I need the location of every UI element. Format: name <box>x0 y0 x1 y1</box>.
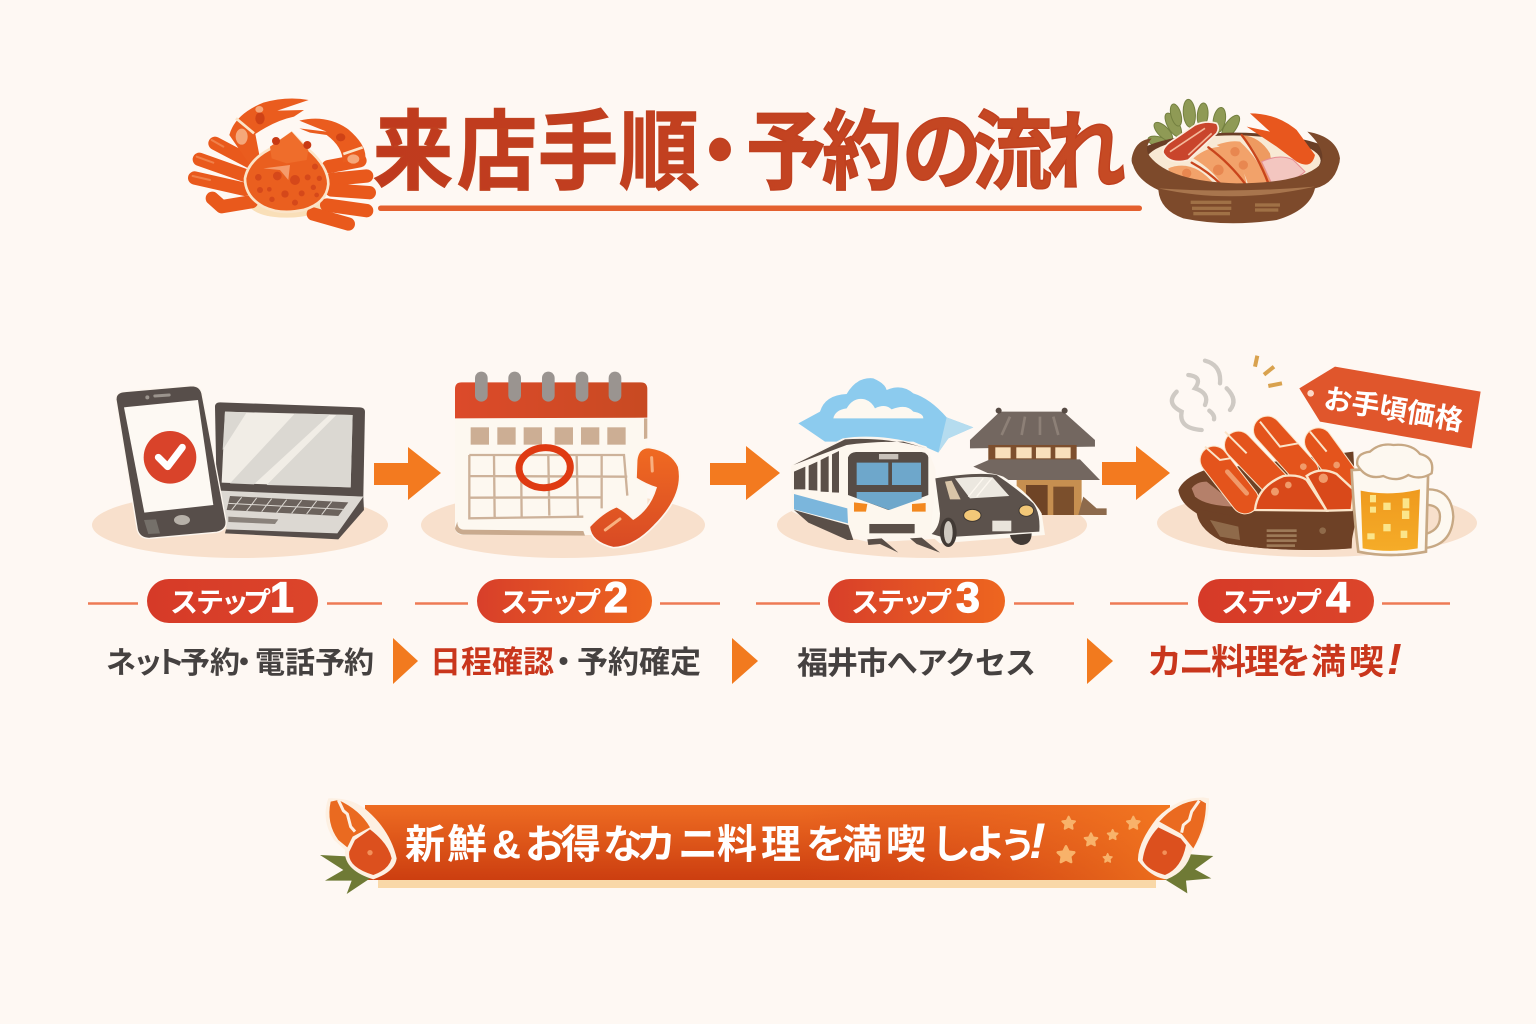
ground shadow <box>777 492 1087 558</box>
step 2 label: ステップ2 <box>500 574 628 622</box>
icon: beer mug <box>1352 445 1453 555</box>
date circle <box>518 446 572 489</box>
icon: sparkle marks <box>1255 356 1282 386</box>
banner text: ! <box>1029 813 1046 869</box>
step 4 pill <box>1198 579 1374 623</box>
title underline <box>378 206 1142 211</box>
arrow 1 <box>374 447 441 500</box>
step 4 label: ステップ4 <box>1221 574 1350 622</box>
step 3 label <box>756 574 1074 681</box>
step 1 label <box>88 574 382 680</box>
right claw <box>299 119 365 163</box>
bowl back <box>1132 133 1340 189</box>
icon: cloud <box>798 378 973 453</box>
step 4 caption: カニ料理を満喫 <box>1147 643 1384 682</box>
check badge <box>144 431 196 484</box>
icon: crab hot pot dish <box>1132 99 1340 223</box>
icon: calendar <box>455 372 647 536</box>
left claw with leaves <box>320 798 397 894</box>
leaves <box>1147 99 1243 149</box>
step 3 pill <box>828 579 1005 623</box>
step 4 caption: ! <box>1387 635 1402 684</box>
small arrow 1 <box>393 638 418 684</box>
price tag <box>1299 367 1481 448</box>
icon: steam <box>1172 361 1233 430</box>
banner text: 新鮮&お得なカニ料理を満喫しよう <box>405 823 1036 867</box>
arrow 3 <box>1102 446 1170 500</box>
icon: shop building <box>970 408 1107 515</box>
step 1 caption: ネット予約・電話予約 <box>106 647 374 680</box>
price tag: お手頃価格 <box>1322 383 1466 436</box>
right claw with leaves <box>1138 797 1213 893</box>
bowl front <box>1132 132 1340 223</box>
bottom banner <box>320 797 1213 894</box>
step 2 pill <box>477 579 652 623</box>
icon: telephone <box>589 448 680 548</box>
step 4 illustration: crab dish, beer and price tag <box>1157 356 1481 557</box>
banner ribbon <box>378 878 1156 888</box>
icon: smartphone <box>116 386 226 538</box>
icon: car <box>930 472 1045 547</box>
small arrow 2 <box>732 638 758 684</box>
step 1 label: ステップ1 <box>170 574 294 622</box>
title area <box>193 98 1340 224</box>
step 3 illustration: train, car and shop <box>777 378 1107 558</box>
arrow 2 <box>710 446 780 500</box>
red segment <box>1163 122 1218 161</box>
ground shadow <box>92 492 388 558</box>
icon: laptop <box>215 402 365 539</box>
step 3 label: ステップ3 <box>851 574 980 622</box>
step 2 label <box>415 574 720 680</box>
step 1 pill <box>147 579 318 623</box>
title text: 来店手順・予約の流れ <box>373 104 1126 201</box>
step 2 illustration: calendar and telephone <box>421 372 705 558</box>
left claw <box>229 98 309 163</box>
icon: train <box>793 439 940 553</box>
small arrow 3 <box>1087 638 1113 684</box>
step 2 caption: 日程確認・予約確定 <box>430 645 701 680</box>
ground shadow <box>421 492 705 558</box>
ground shadow <box>1157 489 1477 557</box>
step 4 label <box>1110 574 1450 684</box>
crab shell <box>245 133 328 212</box>
icon: snow crab <box>193 98 369 224</box>
step 3 caption: 福井市へアクセス <box>797 646 1036 681</box>
claw <box>1247 113 1315 165</box>
step 1 illustration: phone and laptop <box>92 386 388 558</box>
icon: crab legs in bowl <box>1178 422 1357 550</box>
leg segments <box>1168 166 1215 187</box>
banner stars <box>1058 817 1140 862</box>
